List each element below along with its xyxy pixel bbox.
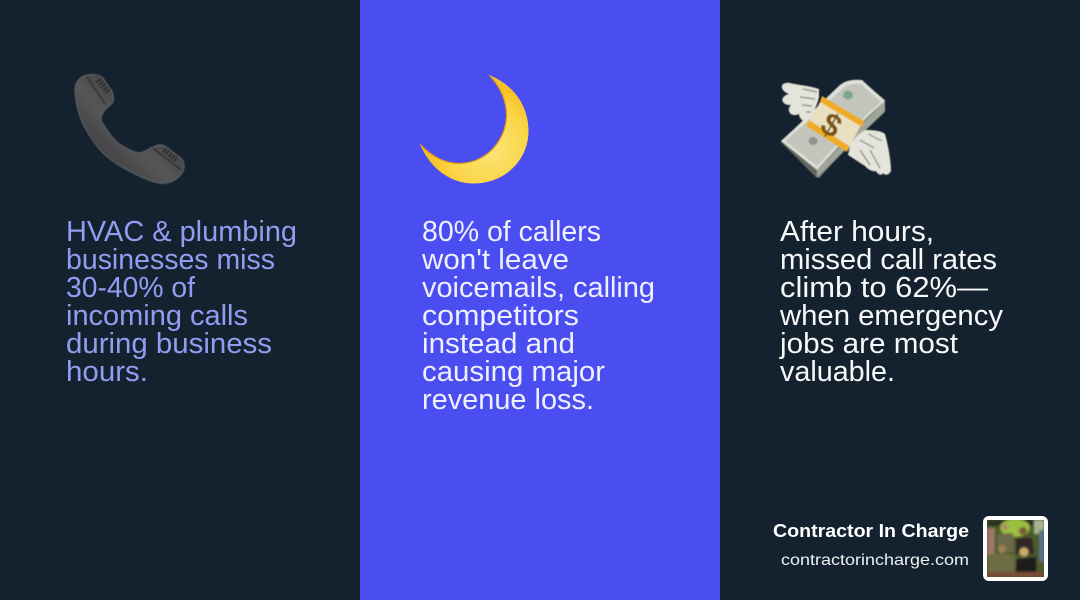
text: right statistic: valuable. [780,356,895,388]
text: left statistic: HVAC & plumbing [66,216,297,248]
text: brand name: Contractor In Charge [773,521,969,541]
icon: money with wings [781,80,891,178]
text: left statistic: incoming calls [66,300,248,332]
panel: background right [720,0,1080,600]
text: left statistic: businesses miss [66,244,275,276]
icon: crescent moon [420,75,529,184]
text: right statistic: After hours, [780,216,934,248]
panel: background middle [360,0,720,600]
text: middle statistic: voicemails, calling [422,272,655,304]
text: left statistic: during business [66,328,272,360]
text: left statistic: 30-40% of [66,272,195,304]
text: right statistic: jobs are most [779,328,958,360]
text: right statistic: missed call rates [780,244,997,276]
text: website: contractorincharge.com [781,552,969,569]
text: middle statistic: won't leave [421,244,569,276]
text: middle statistic: 80% of callers [422,216,601,248]
photo: team portrait [983,516,1048,581]
text: middle statistic [421,216,655,416]
text: left statistic [66,216,297,388]
panel: background left [0,0,360,600]
text: middle statistic: revenue loss. [422,384,594,416]
text: right statistic: when emergency [779,300,1004,332]
icon: telephone receiver [75,74,184,184]
icon: money with wings: $ [815,105,848,145]
text: middle statistic: instead and [422,328,575,360]
text: right statistic: climb to 62%— [780,272,989,304]
text: right statistic [779,216,1004,388]
text: left statistic: hours. [66,356,148,388]
text: middle statistic: competitors [422,300,579,332]
text: middle statistic: causing major [422,356,606,388]
